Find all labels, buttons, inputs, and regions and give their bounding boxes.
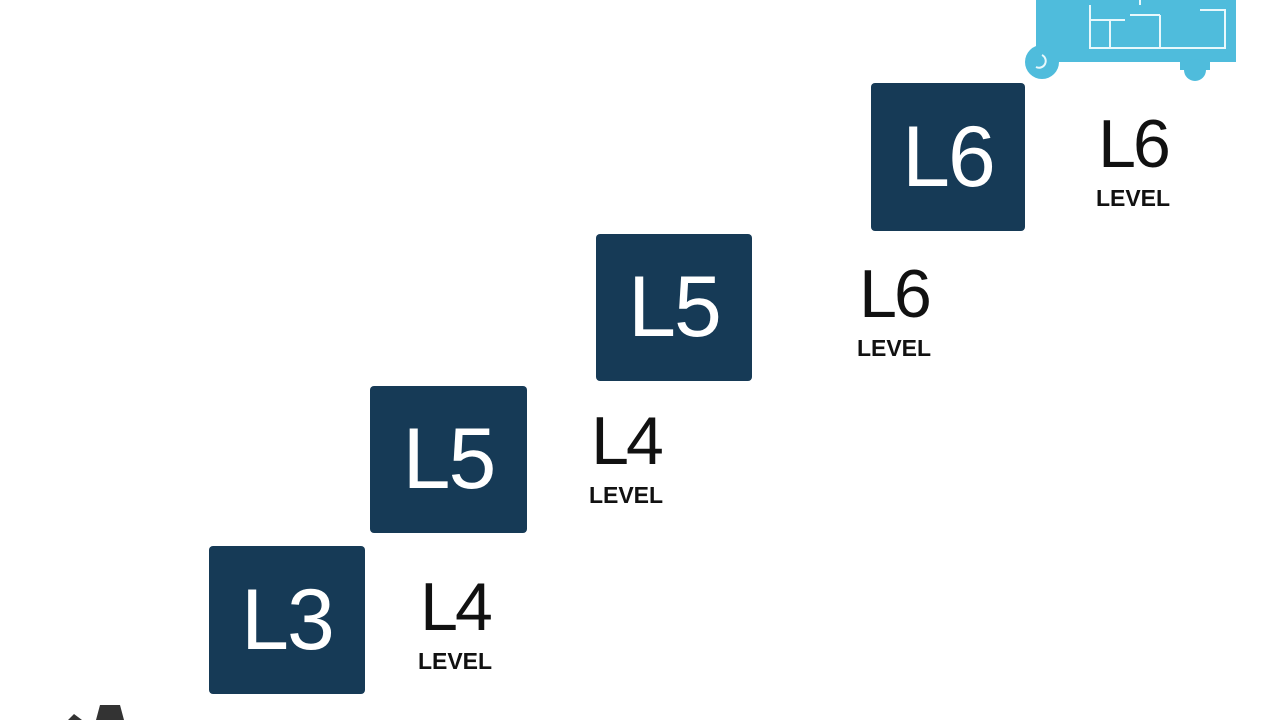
label L6 level <box>857 256 931 361</box>
icon: blueprint <box>1025 0 1236 81</box>
label L4 level upper: L4 <box>591 403 661 479</box>
label L6 level top: L6 <box>1098 106 1168 182</box>
label L4 level: LEVEL <box>418 648 492 674</box>
step box L3 <box>209 546 365 694</box>
step box L5 upper <box>596 234 752 381</box>
step box L5: L5 <box>403 411 494 507</box>
label L4 level upper: LEVEL <box>589 482 663 508</box>
label L6 level top: LEVEL <box>1096 185 1170 211</box>
label L4 level: L4 <box>420 569 490 645</box>
label L6 level: LEVEL <box>857 335 931 361</box>
step box L3: L3 <box>241 572 333 668</box>
step box L5 <box>370 386 527 533</box>
label L6 level top <box>1096 106 1170 211</box>
icon: partial dark shape <box>68 705 124 720</box>
label L6 level: L6 <box>859 256 929 332</box>
label L4 level upper <box>589 403 663 508</box>
label L4 level <box>418 569 492 674</box>
step box L5 upper: L5 <box>628 259 720 355</box>
step box L6 <box>871 83 1025 231</box>
step box L6: L6 <box>902 108 994 204</box>
